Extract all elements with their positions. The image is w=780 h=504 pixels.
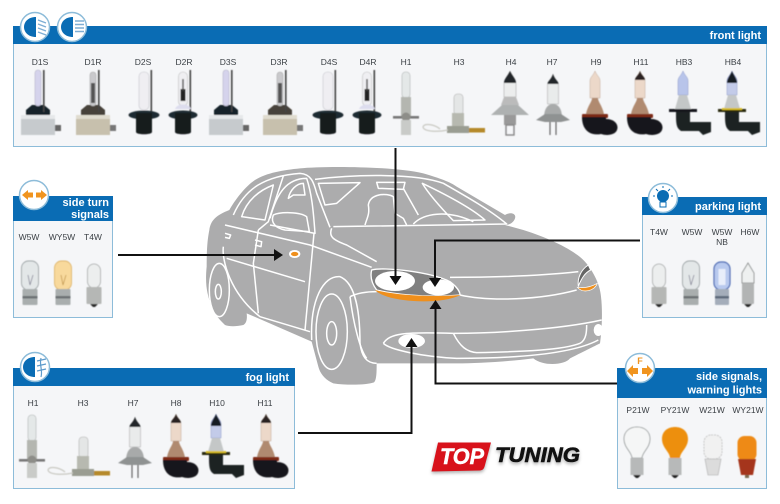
left headlight	[371, 269, 461, 301]
labels: W5W	[712, 227, 732, 237]
labels: WY5W	[49, 232, 75, 242]
fog lamps	[398, 324, 603, 348]
panel: front light	[13, 12, 767, 146]
labels: PY21W	[661, 405, 689, 415]
car white outlines	[209, 173, 602, 369]
side turn header bar	[13, 196, 113, 221]
bulb labels: D4S	[321, 57, 338, 67]
bulb labels: H9	[591, 57, 602, 67]
bulb labels: H4	[506, 57, 517, 67]
bulb labels: HB4	[725, 57, 742, 67]
labels	[650, 227, 759, 247]
bulbs	[19, 414, 289, 478]
signals header bar	[617, 368, 767, 398]
bulb labels	[32, 57, 742, 67]
labels: W21W	[699, 405, 725, 415]
bulb labels: HB3	[676, 57, 693, 67]
bulb labels: D3R	[270, 57, 288, 67]
panel: fog light	[13, 352, 295, 488]
bulb labels: H7	[547, 57, 558, 67]
bulbs	[22, 261, 102, 307]
bulbs	[652, 261, 754, 307]
arrow: parking light to headlight	[429, 240, 640, 287]
labels: H10	[209, 398, 225, 408]
labels: T4W	[84, 232, 102, 242]
labels: W5W	[19, 232, 39, 242]
labels	[626, 405, 764, 415]
labels: WY21W	[732, 405, 764, 415]
labels	[19, 232, 102, 242]
icon: warning arrows: F	[637, 356, 643, 366]
parking title: parking light	[695, 201, 761, 213]
bulb labels: D1S	[32, 57, 49, 67]
labels: T4W	[650, 227, 668, 237]
labels: W5W	[682, 227, 702, 237]
car body silhouette	[206, 167, 602, 385]
right headlight	[577, 265, 597, 291]
labels: NB	[716, 237, 728, 247]
panel: side signals, warning lights	[617, 354, 767, 488]
bulb labels: D3S	[220, 57, 237, 67]
arrow: side signals to headlight strip	[430, 300, 617, 384]
labels: H3	[78, 398, 89, 408]
logo TUNING text: TUNING	[495, 444, 580, 467]
side marker lamp	[289, 250, 300, 258]
arrow: side turn to side marker	[118, 249, 283, 261]
logo red badge	[432, 442, 491, 472]
bulb labels: H1	[401, 57, 412, 67]
bulbs	[624, 427, 756, 478]
icon: warning arrows	[626, 354, 654, 382]
signals title: warning lights	[686, 384, 762, 396]
bulb labels: H11	[634, 57, 649, 67]
front light title: front light	[710, 30, 761, 42]
fog title: fog light	[246, 372, 289, 384]
logo: Top Tuning	[432, 442, 580, 472]
panel: side turn signals	[13, 180, 113, 318]
signals title: side signals,	[696, 371, 762, 383]
bulb images	[21, 70, 760, 135]
icon: high beam	[58, 12, 86, 42]
icon: low beam	[20, 12, 50, 42]
logo TOP text: TOP	[440, 444, 484, 469]
arrow: fog light to fog lamp	[298, 338, 418, 433]
labels: H11	[258, 398, 273, 408]
bulb labels: D4R	[359, 57, 377, 67]
signals title	[686, 371, 762, 396]
labels	[28, 398, 273, 408]
side turn title	[63, 197, 109, 221]
labels: H8	[171, 398, 182, 408]
car illustration	[206, 167, 603, 385]
icon: turn arrows	[20, 180, 48, 210]
parking header bar	[642, 197, 767, 215]
panel: parking light	[642, 184, 767, 318]
front light header bar	[13, 26, 767, 44]
arrow: front light to headlight	[390, 148, 402, 285]
labels: H7	[128, 398, 139, 408]
bulb labels: D2R	[175, 57, 193, 67]
labels: H6W	[741, 227, 759, 237]
side turn title: side turn	[63, 197, 109, 209]
bulb labels: D2S	[135, 57, 152, 67]
labels: H1	[28, 398, 39, 408]
icon: parking bulb	[648, 184, 678, 212]
bulb labels: H3	[454, 57, 465, 67]
fog header bar	[13, 368, 295, 386]
side turn title: signals	[71, 209, 109, 221]
icon: fog lamp	[20, 352, 50, 382]
bulb labels: D1R	[84, 57, 102, 67]
labels: P21W	[626, 405, 650, 415]
